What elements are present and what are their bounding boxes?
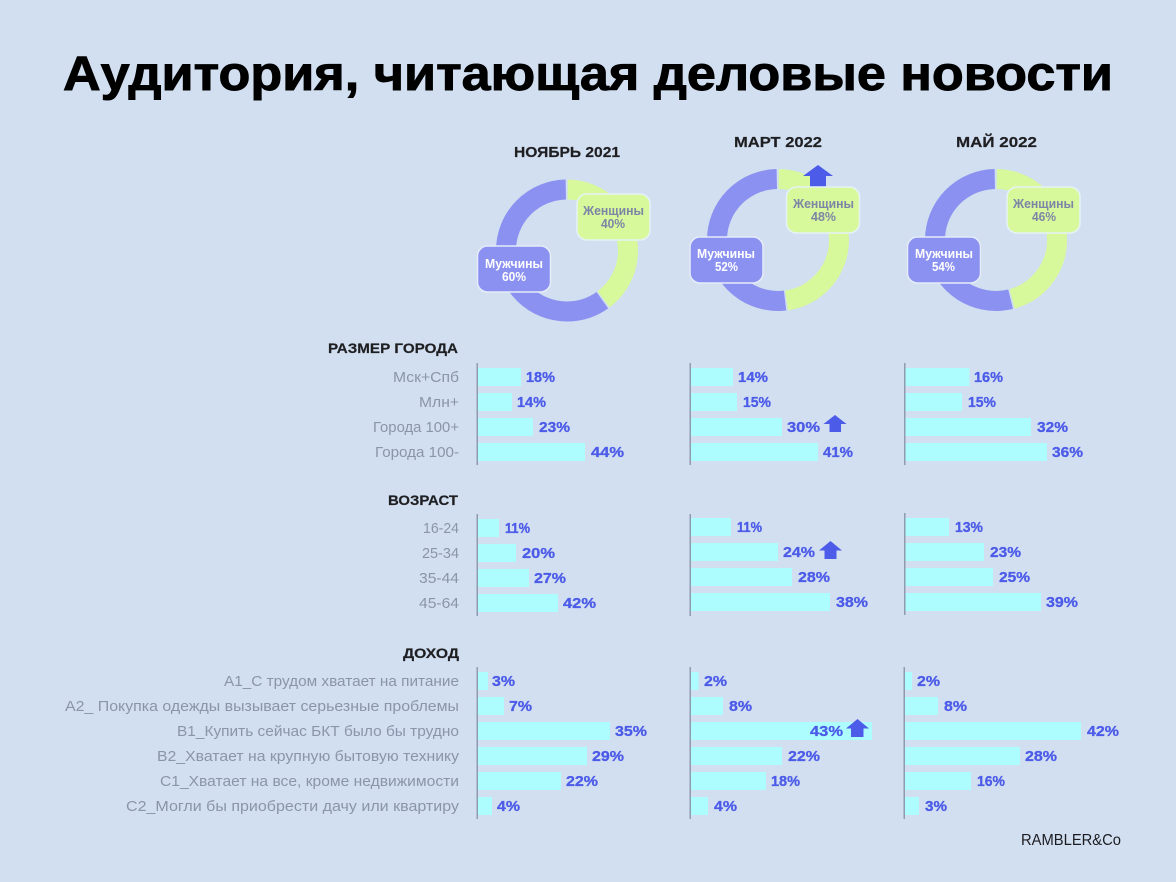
heading: age: ВОЗРАСТ [388,492,458,508]
bar chart: income May 2022: 28% [1025,748,1057,765]
heading: November 2021: НОЯБРЬ 2021 [514,145,620,161]
bar chart: age November 2021: 11% [505,520,530,537]
panel: city size [328,340,1083,465]
logo: Rambler&Co: RAMBLER&Co [1021,832,1121,849]
bar chart: age May 2022: 25% [999,569,1030,586]
bar chart: city size November 2021: 23% [539,419,570,436]
bar chart: age March 2022: 38% [836,594,868,611]
bar chart: city size November 2021: 14% [517,394,546,411]
bar chart: income November 2021 [476,667,647,819]
bar chart: income November 2021: 7% [509,698,532,715]
row labels: city size: Млн+ [419,394,459,411]
bar chart: city size May 2022: 32% [1037,419,1068,436]
bar chart: city size November 2021: 44% [591,444,624,461]
bar chart: city size November 2021: 18% [526,369,555,386]
callout: men 54%: 54% [932,260,955,274]
bar chart: income May 2022: 42% [1087,723,1119,740]
bar chart: age March 2022: 11% [737,519,762,536]
bar chart: city size March 2022 [690,363,853,465]
bar chart: age March 2022: 24% [783,544,815,561]
row labels: income: А1_С трудом хватает на питание [224,673,459,690]
bar chart: age March 2022 [690,514,868,616]
callout: men 54% [908,237,980,283]
panel: income [65,645,1119,819]
heading: May 2022: МАЙ 2022 [956,133,1037,151]
bar chart: city size May 2022: 15% [968,394,996,411]
bar chart: income March 2022: 2% [704,673,727,690]
callout: men 60% [478,246,550,292]
callout: men 52%: 52% [715,260,738,274]
callout: men 52%: Мужчины [697,247,755,261]
panel: donut May 2022 [908,133,1080,301]
heading: city size: РАЗМЕР ГОРОДА [328,340,458,356]
donut ring November [506,190,628,312]
bar chart: income March 2022 [690,667,872,819]
bar chart: age November 2021: 27% [534,570,566,587]
callout: women 48% [786,187,860,233]
panel: donut March 2022 [690,135,860,301]
bar chart: city size November 2021 [476,363,624,465]
callout: women 46% [1007,187,1080,233]
callout: men 52% [690,237,763,283]
bar chart: income November 2021: 22% [566,773,598,790]
bar chart: age March 2022: 28% [798,569,830,586]
bar chart: income November 2021: 35% [615,723,647,740]
callout: women 40% [577,194,650,240]
callout: women 40%: Женщины [582,204,644,218]
row labels: age: 35-44 [419,570,459,587]
bar chart: income March 2022: 4% [714,798,737,815]
bar chart: income May 2022: 2% [917,673,940,690]
title: Аудитория, читающая деловые новости [63,48,1113,101]
bar chart: city size March 2022: 14% [738,369,768,386]
bar chart: age May 2022 [904,513,1078,615]
icon: up arrow 30% [824,415,846,432]
bar chart: income March 2022: 18% [771,773,800,790]
bar chart: city size March 2022: 30% [787,419,820,436]
bar chart: city size May 2022: 36% [1052,444,1083,461]
heading: March 2022: МАРТ 2022 [734,135,822,151]
row labels: income: С2_Могли бы приобрести дачу или квартиру [126,798,460,815]
bar chart: age May 2022: 13% [955,519,983,536]
bar chart: income March 2022: 8% [729,698,752,715]
bar chart: income November 2021: 3% [492,673,515,690]
row labels: age: 25-34 [422,545,459,562]
bar chart: city size May 2022 [904,363,1083,465]
bar chart: income March 2022: 43% [810,723,843,740]
icon: up arrow 24% [819,541,842,559]
icon: up arrow women [803,165,833,187]
bar chart: income November 2021: 29% [592,748,624,765]
icon: up arrow 43% [846,719,869,737]
bar chart: age November 2021 [476,514,596,616]
bar chart: age May 2022: 23% [990,544,1021,561]
row labels: city size [373,369,459,461]
bar chart: income March 2022: 22% [788,748,820,765]
callout: women 46%: 46% [1032,210,1056,224]
donut ring March [717,179,839,301]
bar chart: city size March 2022: 15% [743,394,771,411]
row labels: age: 16-24 [423,520,459,537]
bar chart: city size May 2022: 16% [974,369,1003,386]
bar chart: income May 2022 [904,667,1119,819]
heading: income: ДОХОД [403,645,459,661]
callout: women 48%: Женщины [792,197,854,211]
row labels: city size: Города 100+ [373,419,459,436]
bar chart: income May 2022: 3% [925,798,947,815]
row labels: income [65,673,460,815]
donut ring May [935,179,1057,301]
bar chart: income May 2022: 16% [977,773,1005,790]
row labels: income: С1_Хватает на все, кроме недвижимости [160,773,459,790]
bar chart: age May 2022: 39% [1046,594,1078,611]
row labels: income: А2_ Покупка одежды вызывает серьезные проблемы [65,698,459,715]
callout: women 46%: Женщины [1012,197,1074,211]
row labels: income: В2_Хватает на крупную бытовую технику [157,748,460,765]
row labels: age: 45-64 [419,595,459,612]
row labels: city size: Мск+Спб [393,369,459,386]
bar chart: city size March 2022: 41% [823,444,853,461]
row labels: age [419,520,459,612]
row labels: income: В1_Купить сейчас БКТ было бы трудно [177,723,459,740]
bar chart: income May 2022: 8% [944,698,967,715]
row labels: city size: Города 100- [375,444,459,461]
panel: donut November 2021 [478,145,650,312]
bar chart: age November 2021: 20% [522,545,555,562]
callout: men 60%: 60% [502,270,526,284]
bar chart: age November 2021: 42% [563,595,596,612]
callout: women 48%: 48% [811,210,836,224]
callout: women 40%: 40% [601,217,625,231]
callout: men 60%: Мужчины [485,257,543,271]
callout: men 54%: Мужчины [915,247,973,261]
bar chart: income November 2021: 4% [497,798,520,815]
panel: age [388,492,1078,616]
